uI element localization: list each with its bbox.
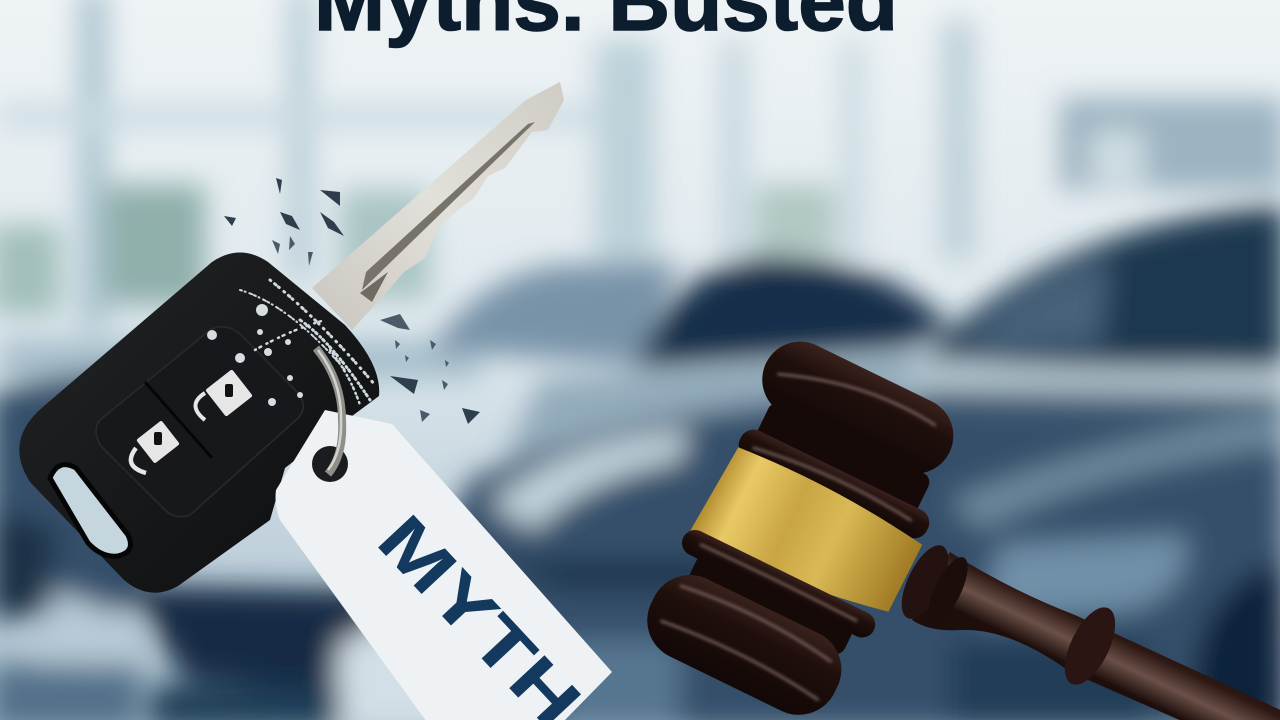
key blade	[312, 82, 564, 330]
gold band	[688, 442, 926, 630]
bottom cap	[634, 562, 855, 720]
handle collar beads	[892, 539, 958, 625]
bottom neck	[686, 551, 855, 657]
key fob body	[19, 252, 379, 593]
fob grip slot	[50, 465, 130, 556]
gavel handle	[912, 552, 1280, 720]
tag: myth	[276, 348, 612, 720]
blade base notch	[360, 272, 388, 302]
tag label: MYTH	[363, 500, 596, 720]
cap highlights	[657, 351, 955, 702]
shatter speckles	[240, 280, 375, 405]
icon: locked padlock	[131, 420, 180, 473]
key ring highlight	[318, 350, 341, 470]
top cap	[749, 329, 966, 487]
blade groove	[362, 122, 535, 290]
fob button panel	[96, 327, 303, 517]
icon: gavel	[632, 329, 1280, 720]
icon: unlocked padlock	[196, 369, 253, 420]
top neck	[753, 400, 933, 517]
icon: car key	[19, 82, 564, 593]
handle ring	[1055, 600, 1125, 692]
bottom ridge	[678, 526, 880, 642]
flying fragments	[207, 178, 480, 506]
button divider	[145, 382, 212, 458]
top ridge	[734, 425, 934, 543]
key ring	[316, 348, 342, 474]
tag eyelet	[312, 446, 348, 482]
